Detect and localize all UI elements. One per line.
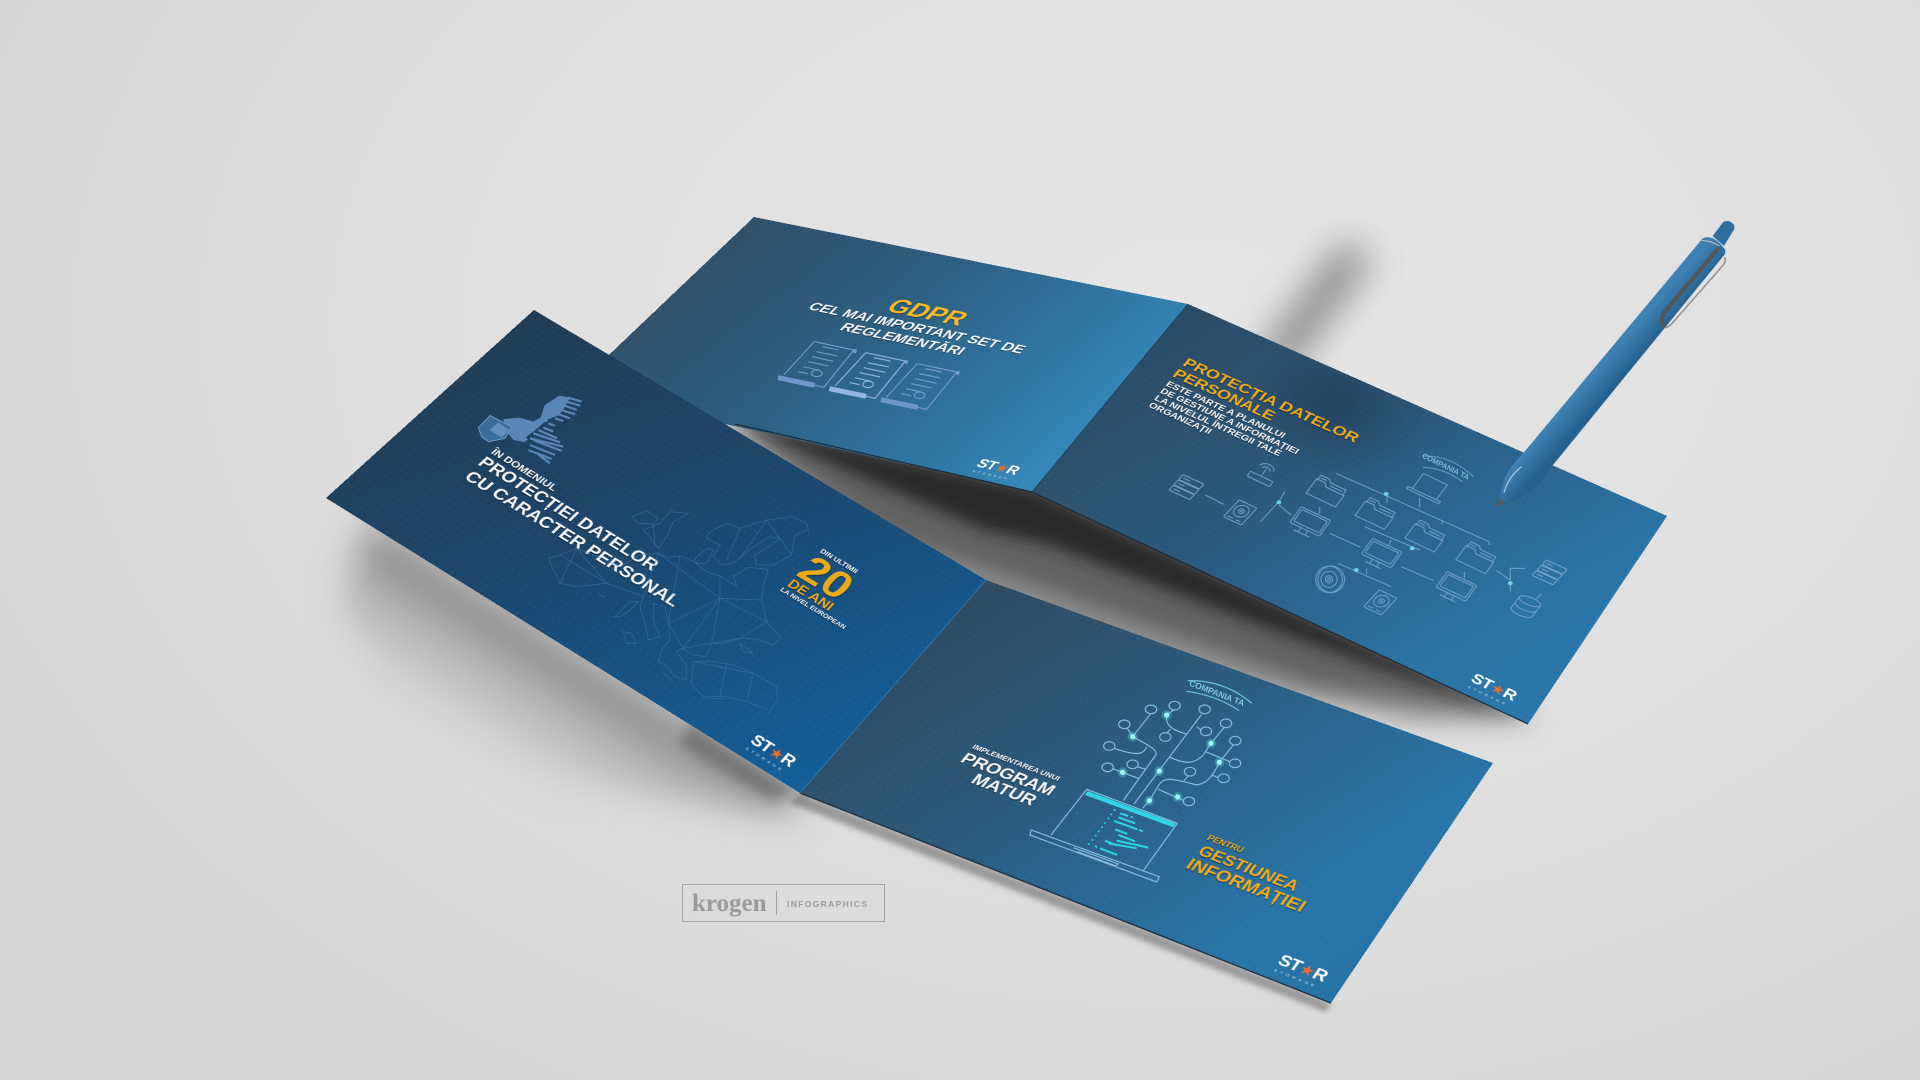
label: compania ta network: COMPANIA TA [1421, 451, 1471, 482]
logo: STORAGE [971, 469, 1011, 481]
text: implementarea unui: IMPLEMENTAREA UNUI [970, 743, 1062, 783]
pen highlight [1504, 467, 1522, 493]
icon: monitor 2 [1358, 538, 1402, 572]
logo: STORAGE [1273, 968, 1319, 989]
text block: plan de gestiune: LA NIVELUL ÎNTREGII TALE [1152, 394, 1284, 458]
paper edges [735, 304, 1528, 1003]
icon: laptop [1407, 471, 1451, 504]
scandinavia [707, 517, 808, 565]
shadow under pages: core [730, 420, 1525, 720]
shield [478, 416, 512, 442]
heading: protectiei datelor: PROTECȚIEI DATELOR [474, 454, 663, 574]
shadow at fold [680, 722, 805, 800]
watermark: krogen infographics [682, 884, 884, 922]
icon: three scrolls [778, 342, 959, 409]
pen shadow [1270, 250, 1358, 368]
shadow under cover page [340, 520, 800, 815]
heading: matur: MATUR [967, 770, 1041, 809]
logo: ST★R [973, 456, 1023, 477]
pen tip [1495, 499, 1505, 507]
icon: router [1247, 460, 1282, 487]
watermark divider [776, 891, 778, 915]
icon: monitor 1 [1287, 507, 1331, 540]
icon: disc [1316, 566, 1344, 592]
ireland [632, 511, 658, 524]
icon: monitor 3 [1433, 572, 1477, 605]
icon: hard disk 1 [1224, 500, 1257, 525]
mainland [548, 548, 782, 680]
islands [590, 592, 753, 698]
diagram: company network [1169, 456, 1567, 620]
text block: plan de gestiune: DE GESTIUNE A INFORMAȚIEI [1158, 387, 1301, 456]
panel: protectia datelor page [1032, 304, 1667, 724]
pen barrel [1499, 237, 1725, 504]
pen [1495, 221, 1734, 507]
heading: gestiunea: GESTIUNEA [1195, 842, 1303, 895]
watermark tagline: INFOGRAPHICS [787, 899, 868, 909]
logo: ST★R [1274, 951, 1331, 985]
tree branches [1113, 709, 1233, 808]
shield highlight [489, 422, 509, 438]
logo: STORAGE [744, 746, 785, 773]
britain [643, 512, 688, 548]
heading: program: PROGRAM [957, 749, 1060, 799]
turkey [692, 662, 777, 711]
glow nodes [1276, 492, 1513, 585]
silhouette [503, 396, 570, 442]
heading line 2: REGLEMENTĂRI [836, 320, 969, 358]
text block: plan de gestiune: ESTE PARTE A PLANULUI [1164, 380, 1287, 440]
watermark wordmark: krogen [692, 890, 767, 917]
laptop outline [1030, 789, 1177, 882]
text: la nivel european: LA NIVEL EUROPEAN [779, 586, 848, 630]
arc: company label [1423, 456, 1474, 482]
heading: set de reglementari: CEL MAI IMPORTANT SET DE [805, 300, 1029, 356]
icon: folder 4 [1456, 541, 1499, 574]
text: de ani: DE ANI [784, 577, 837, 613]
icon: person with shield [478, 396, 582, 463]
mesh [560, 520, 792, 702]
heading line 2: PERSONALE [1169, 366, 1279, 424]
heading: GDPR: GDPR [881, 295, 974, 330]
pen button [1713, 221, 1734, 246]
number: 20: 20 [789, 547, 864, 608]
icon: server 2 [1532, 560, 1567, 585]
code dots [1088, 809, 1116, 845]
denmark [695, 548, 713, 563]
text block: plan de gestiune: ORGANIZAȚII [1146, 401, 1214, 436]
label: compania ta tree: COMPANIA TA [1188, 678, 1246, 708]
text: din ultimii: DIN ULTIMII [818, 547, 860, 575]
shadow under pages: outer [720, 410, 1535, 720]
shadow under lower page edge [790, 793, 1331, 1012]
panel: europe cover page [326, 310, 986, 793]
arc: company label [1187, 681, 1252, 711]
text: in domeniul: ÎN DOMENIUL [489, 447, 560, 493]
icon: database [1509, 587, 1548, 620]
pen clip [1662, 241, 1725, 328]
logo: STORAGE [1467, 685, 1509, 707]
icon: folder 2 [1355, 497, 1398, 529]
tree leaves [1102, 701, 1241, 806]
panel: GDPR page [572, 217, 1188, 492]
connectors [1205, 473, 1526, 592]
icon: server 1 [1169, 475, 1204, 500]
data stripes [525, 398, 582, 463]
icon: hard disk 2 [1364, 590, 1397, 615]
tree glow nodes [1118, 710, 1224, 806]
icon: scroll 2 [829, 353, 908, 398]
heading: cu caracter personal: CU CARACTER PERSONAL [460, 468, 684, 610]
diagram: data tree on laptop [1030, 681, 1252, 882]
icon: scroll 3 [881, 364, 959, 409]
heading: informatiei: INFORMAȚIEI [1183, 855, 1310, 915]
watermark frame [682, 884, 884, 922]
code lines [1095, 813, 1148, 855]
icon: scroll 1 [778, 342, 856, 387]
laptop title bar [1085, 791, 1176, 827]
heading: protectia datelor personale: PROTECȚIA DATELOR [1180, 355, 1363, 446]
text: pentru: PENTRU [1205, 834, 1245, 855]
logo: ST★R [1468, 670, 1520, 704]
shadow under pages: middle [725, 415, 1530, 718]
panel: program matur page [800, 580, 1493, 1003]
logo: ST★R [747, 731, 800, 770]
map: europe [548, 511, 808, 711]
icon: folder 1 [1306, 474, 1349, 507]
icon: folder 3 [1405, 519, 1448, 552]
